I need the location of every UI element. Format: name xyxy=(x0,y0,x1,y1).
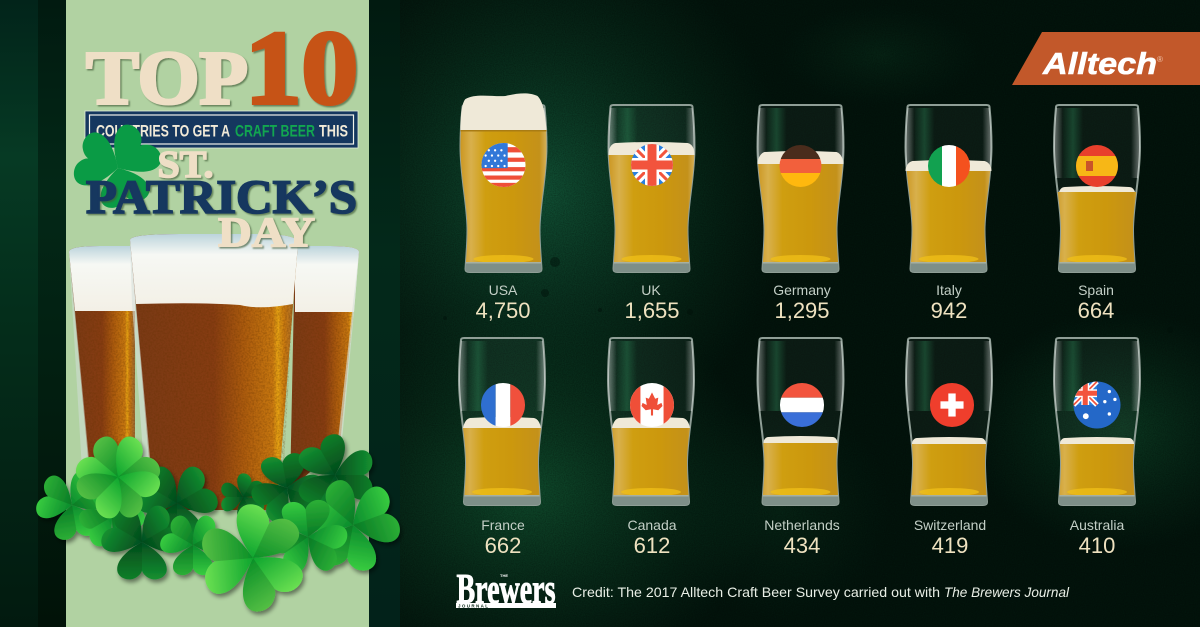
beer glass: UK xyxy=(606,105,696,323)
flag: Germany xyxy=(780,145,822,187)
value: Switzerland: 419 xyxy=(932,533,968,558)
flag: Spain xyxy=(1076,145,1118,187)
beer glass: France xyxy=(457,338,547,558)
banner: countries to get a craft beer this xyxy=(85,111,358,148)
logo: The Brewers Journal: THE xyxy=(500,573,508,578)
banner: countries to get a craft beer this: CRAFT BEER xyxy=(235,122,315,140)
value: France: 662 xyxy=(485,533,521,558)
banner: countries to get a craft beer this: THIS xyxy=(319,122,348,140)
value: Australia: 410 xyxy=(1079,533,1115,558)
value: Italy: 942 xyxy=(931,298,967,323)
beer glass: Canada xyxy=(606,338,696,558)
flag: USA xyxy=(481,143,526,187)
value: USA: 4,750 xyxy=(475,298,531,323)
flag: Canada xyxy=(630,383,674,427)
right back pint xyxy=(290,246,359,490)
logo: Alltech xyxy=(1012,32,1200,85)
label: France: France xyxy=(481,517,525,533)
beer glass: Spain xyxy=(1052,105,1142,323)
label: USA: USA xyxy=(489,282,518,298)
logo: Alltech: Alltech xyxy=(1042,46,1157,81)
beer glass: Germany xyxy=(756,105,846,323)
label: Germany: Germany xyxy=(773,282,831,298)
flag: Netherlands xyxy=(780,383,824,427)
panel: left green column xyxy=(66,0,369,627)
value: Canada: 612 xyxy=(634,533,670,558)
heading: St.: ST. xyxy=(158,144,214,186)
banner: countries to get a craft beer this: COUNTRIES TO GET A xyxy=(96,122,230,140)
flag: Switzerland xyxy=(930,383,974,427)
left back pint xyxy=(69,246,135,480)
title group xyxy=(71,9,358,256)
label: Spain: Spain xyxy=(1078,282,1114,298)
icon: flat shamrock xyxy=(71,120,166,211)
credit text: Credit: The 2017 Alltech Craft Beer Survey carried out with xyxy=(572,584,940,600)
logo: The Brewers Journal: JOURNAL xyxy=(458,603,488,608)
label: Italy: Italy xyxy=(936,282,962,298)
heading: 10: 10 xyxy=(245,9,358,126)
beer glass: Netherlands xyxy=(756,338,846,558)
value: Germany: 1,295 xyxy=(774,298,830,323)
flag: UK xyxy=(631,144,673,186)
beer glass: Switzerland xyxy=(904,338,994,558)
flag: Australia xyxy=(1073,381,1121,429)
logo: Alltech: ® xyxy=(1157,55,1163,64)
logo: The Brewers Journal: Brewers xyxy=(456,567,556,613)
label: UK: UK xyxy=(641,282,661,298)
beer glass: Australia xyxy=(1052,338,1142,558)
value: UK: 1,655 xyxy=(624,298,680,323)
logo: The Brewers Journal xyxy=(456,567,556,613)
beer glass: USA xyxy=(458,93,548,323)
label: Netherlands: Netherlands xyxy=(764,517,840,533)
beer glasses illustration xyxy=(69,234,359,510)
center front pint xyxy=(130,234,298,510)
credit text: The Brewers Journal xyxy=(944,584,1070,600)
flag: Italy xyxy=(928,145,970,187)
shamrock cluster xyxy=(27,420,412,627)
label: Canada: Canada xyxy=(627,517,677,533)
flag: France xyxy=(481,383,525,427)
value: Netherlands: 434 xyxy=(784,533,820,558)
heading: Day: DAY xyxy=(218,210,315,256)
beer glass: Italy xyxy=(904,105,994,323)
label: Switzerland: Switzerland xyxy=(914,517,986,533)
heading: Patrick's: PATRICK’S xyxy=(86,171,357,224)
heading: TOP: TOP xyxy=(86,36,248,120)
label: Australia: Australia xyxy=(1070,517,1124,533)
value: Spain: 664 xyxy=(1078,298,1114,323)
